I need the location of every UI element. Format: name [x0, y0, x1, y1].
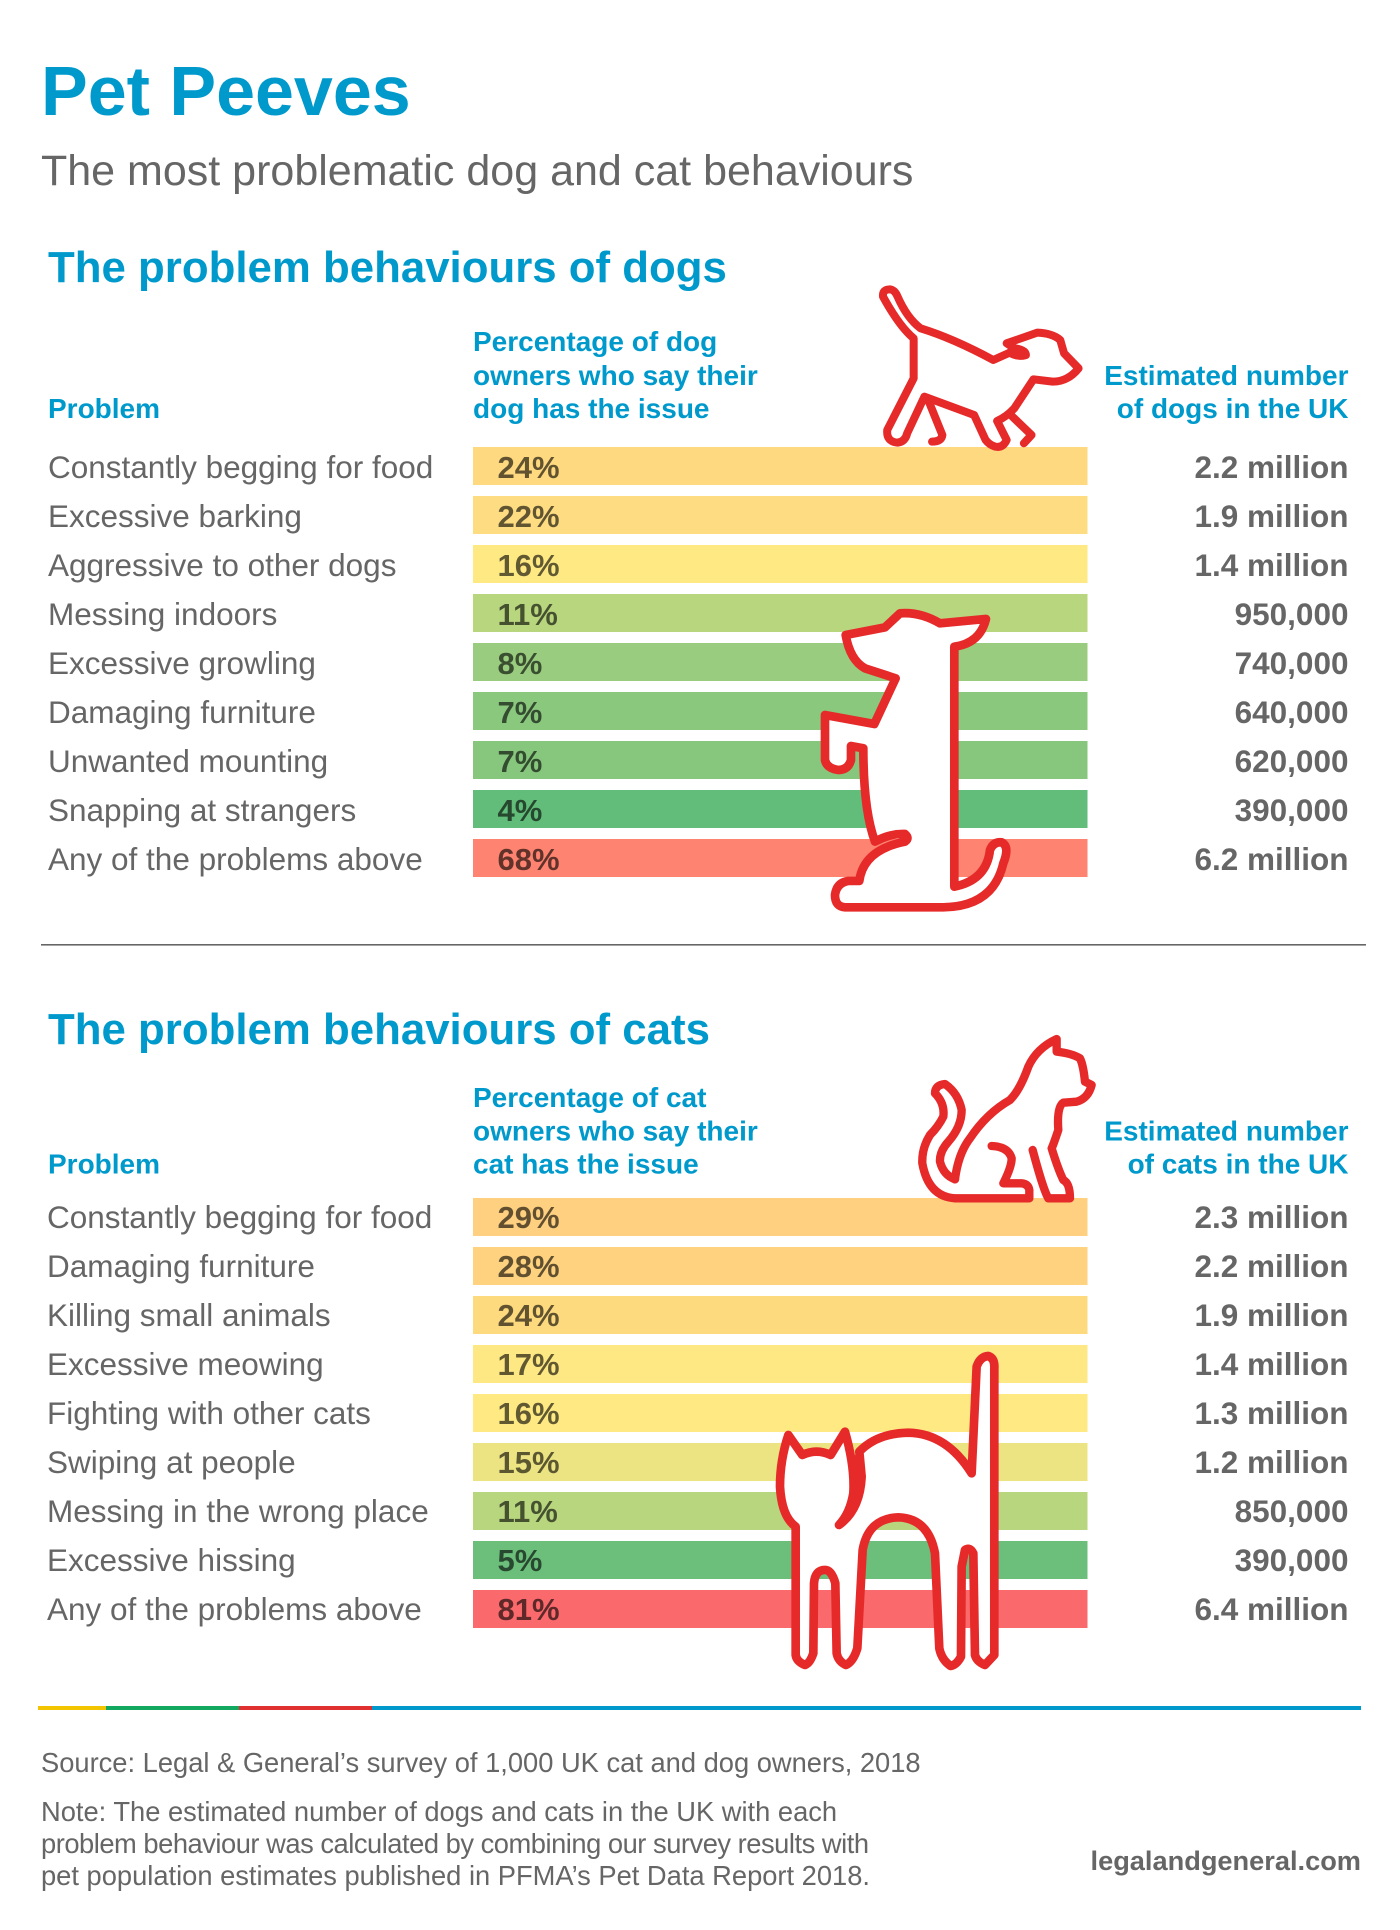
- row: unwanted mounting: 620,000: [1235, 743, 1348, 779]
- row: messing: 11%: [498, 1494, 558, 1529]
- row: snapping: Snapping at strangers: [48, 792, 356, 828]
- heading: dogs: The problem behaviours of dogs: [48, 243, 727, 292]
- row: any of the problems: Any of the problems above: [47, 1591, 422, 1627]
- row: aggressive: [48, 545, 1348, 583]
- row: excessive hissing: 390,000: [1235, 1542, 1348, 1578]
- row: aggressive: 16%: [498, 548, 560, 583]
- row: messing indoors: Messing indoors: [48, 596, 277, 632]
- row: messing indoors: 950,000: [1235, 596, 1348, 632]
- row: snapping: 4%: [498, 793, 542, 828]
- row: killing small animals: 1.9 million: [1194, 1297, 1348, 1333]
- column header: problem: Problem: [48, 393, 160, 424]
- row: excessive hissing: [47, 1541, 1348, 1579]
- row: constantly begging: Constantly begging for food: [48, 449, 433, 485]
- row: aggressive: Aggressive to other dogs: [48, 547, 396, 583]
- icon: begging dog: [825, 613, 1006, 907]
- row: unwanted mounting: Unwanted mounting: [48, 743, 328, 779]
- row: fighting: 1.3 million: [1194, 1395, 1348, 1431]
- row: messing indoors: [48, 594, 1348, 632]
- row: excessive hissing: 5%: [498, 1543, 542, 1578]
- row: constantly begging: 24%: [498, 450, 560, 485]
- heading: cats: The problem behaviours of cats: [48, 1005, 710, 1054]
- column header: percentage: dog has the issue: [473, 393, 710, 424]
- row: excessive growling: Excessive growling: [48, 645, 316, 681]
- column header: problem: Problem: [48, 1148, 160, 1180]
- row: constantly begging: [48, 447, 1348, 485]
- note: Note: The estimated number of dogs and cats in the UK with each: [41, 1796, 837, 1827]
- row: constantly begging: Constantly begging for food: [47, 1199, 432, 1235]
- panel: cats: [47, 1005, 1349, 1666]
- row: any of the problems: 6.2 million: [1194, 841, 1348, 877]
- row: damaging furniture: 7%: [498, 695, 542, 730]
- row: killing small animals: 24%: [498, 1298, 560, 1333]
- row: snapping: [48, 790, 1348, 828]
- divider: [41, 944, 1366, 946]
- row: excessive meowing: Excessive meowing: [47, 1346, 324, 1382]
- row: damaging furniture: [48, 692, 1348, 730]
- title: Pet Peeves: [41, 52, 411, 130]
- row: messing: Messing in the wrong place: [47, 1493, 429, 1529]
- row: swiping: [47, 1443, 1348, 1481]
- source: Source: Legal & General’s survey of 1,000 UK cat and dog owners, 2018: [41, 1747, 921, 1778]
- row: killing small animals: [47, 1296, 1348, 1334]
- column header: percentage: cat has the issue: [473, 1148, 699, 1180]
- column header: percentage: Percentage of dog: [473, 326, 717, 357]
- subtitle: The most problematic dog and cat behaviours: [41, 147, 913, 195]
- website: legalandgeneral.com: [1091, 1845, 1361, 1876]
- column header: estimated number: Estimated number: [1104, 1116, 1349, 1146]
- row: damaging furniture: 640,000: [1235, 694, 1348, 730]
- row: any of the problems: 6.4 million: [1194, 1591, 1348, 1627]
- row: snapping: 390,000: [1235, 792, 1348, 828]
- footer rule: [38, 1706, 1361, 1710]
- column header: percentage: Percentage of cat: [473, 1082, 706, 1113]
- icon: arched cat: [780, 1356, 994, 1666]
- row: excessive hissing: Excessive hissing: [47, 1542, 296, 1578]
- column header: estimated number: of dogs in the UK: [1117, 393, 1348, 424]
- row: damaging furniture: Damaging furniture: [48, 694, 316, 730]
- column header: percentage: owners who say their: [473, 1116, 758, 1146]
- row: constantly begging: 2.2 million: [1194, 449, 1348, 485]
- note: pet population estimates published in PFMA’s Pet Data Report 2018.: [41, 1860, 870, 1891]
- row: killing small animals: Killing small animals: [47, 1297, 331, 1333]
- row: swiping: 15%: [498, 1445, 560, 1480]
- note: problem behaviour was calculated by combining our survey results with: [41, 1828, 869, 1859]
- row: damaging furniture: 28%: [498, 1249, 560, 1284]
- row: excessive barking: Excessive barking: [48, 498, 302, 534]
- row: messing indoors: 11%: [498, 597, 558, 632]
- row: excessive meowing: [47, 1345, 1348, 1383]
- row: constantly begging: [47, 1198, 1348, 1236]
- row: unwanted mounting: [48, 741, 1348, 779]
- row: unwanted mounting: 7%: [498, 744, 542, 779]
- row: excessive growling: 8%: [498, 646, 542, 681]
- row: fighting: 16%: [498, 1396, 560, 1431]
- row: damaging furniture: 2.2 million: [1194, 1248, 1348, 1284]
- icon: walking dog: [883, 289, 1079, 447]
- panel: dogs: [48, 243, 1349, 907]
- column header: percentage: owners who say their: [473, 360, 758, 391]
- row: any of the problems: [47, 1590, 1348, 1628]
- row: excessive growling: 740,000: [1235, 645, 1348, 681]
- row: excessive meowing: 1.4 million: [1194, 1346, 1348, 1382]
- row: aggressive: 1.4 million: [1194, 547, 1348, 583]
- row: excessive barking: [48, 496, 1348, 534]
- row: any of the problems: Any of the problems above: [48, 841, 423, 877]
- row: excessive barking: 22%: [498, 499, 560, 534]
- row: excessive barking: 1.9 million: [1194, 498, 1348, 534]
- row: damaging furniture: [47, 1247, 1348, 1285]
- row: damaging furniture: Damaging furniture: [47, 1248, 315, 1284]
- row: messing: 850,000: [1235, 1493, 1348, 1529]
- row: excessive meowing: 17%: [498, 1347, 560, 1382]
- column header: estimated number: of cats in the UK: [1128, 1148, 1348, 1180]
- row: any of the problems: [48, 839, 1348, 877]
- row: constantly begging: 29%: [498, 1200, 560, 1235]
- column header: estimated number: Estimated number: [1104, 360, 1349, 391]
- row: messing: [47, 1492, 1348, 1530]
- row: excessive growling: [48, 643, 1348, 681]
- row: swiping: Swiping at people: [47, 1444, 296, 1480]
- row: any of the problems: 81%: [498, 1592, 560, 1627]
- row: fighting: Fighting with other cats: [47, 1395, 371, 1431]
- row: any of the problems: 68%: [498, 842, 560, 877]
- row: fighting: [47, 1394, 1348, 1432]
- row: constantly begging: 2.3 million: [1194, 1199, 1348, 1235]
- row: swiping: 1.2 million: [1194, 1444, 1348, 1480]
- icon: sitting cat: [922, 1039, 1092, 1198]
